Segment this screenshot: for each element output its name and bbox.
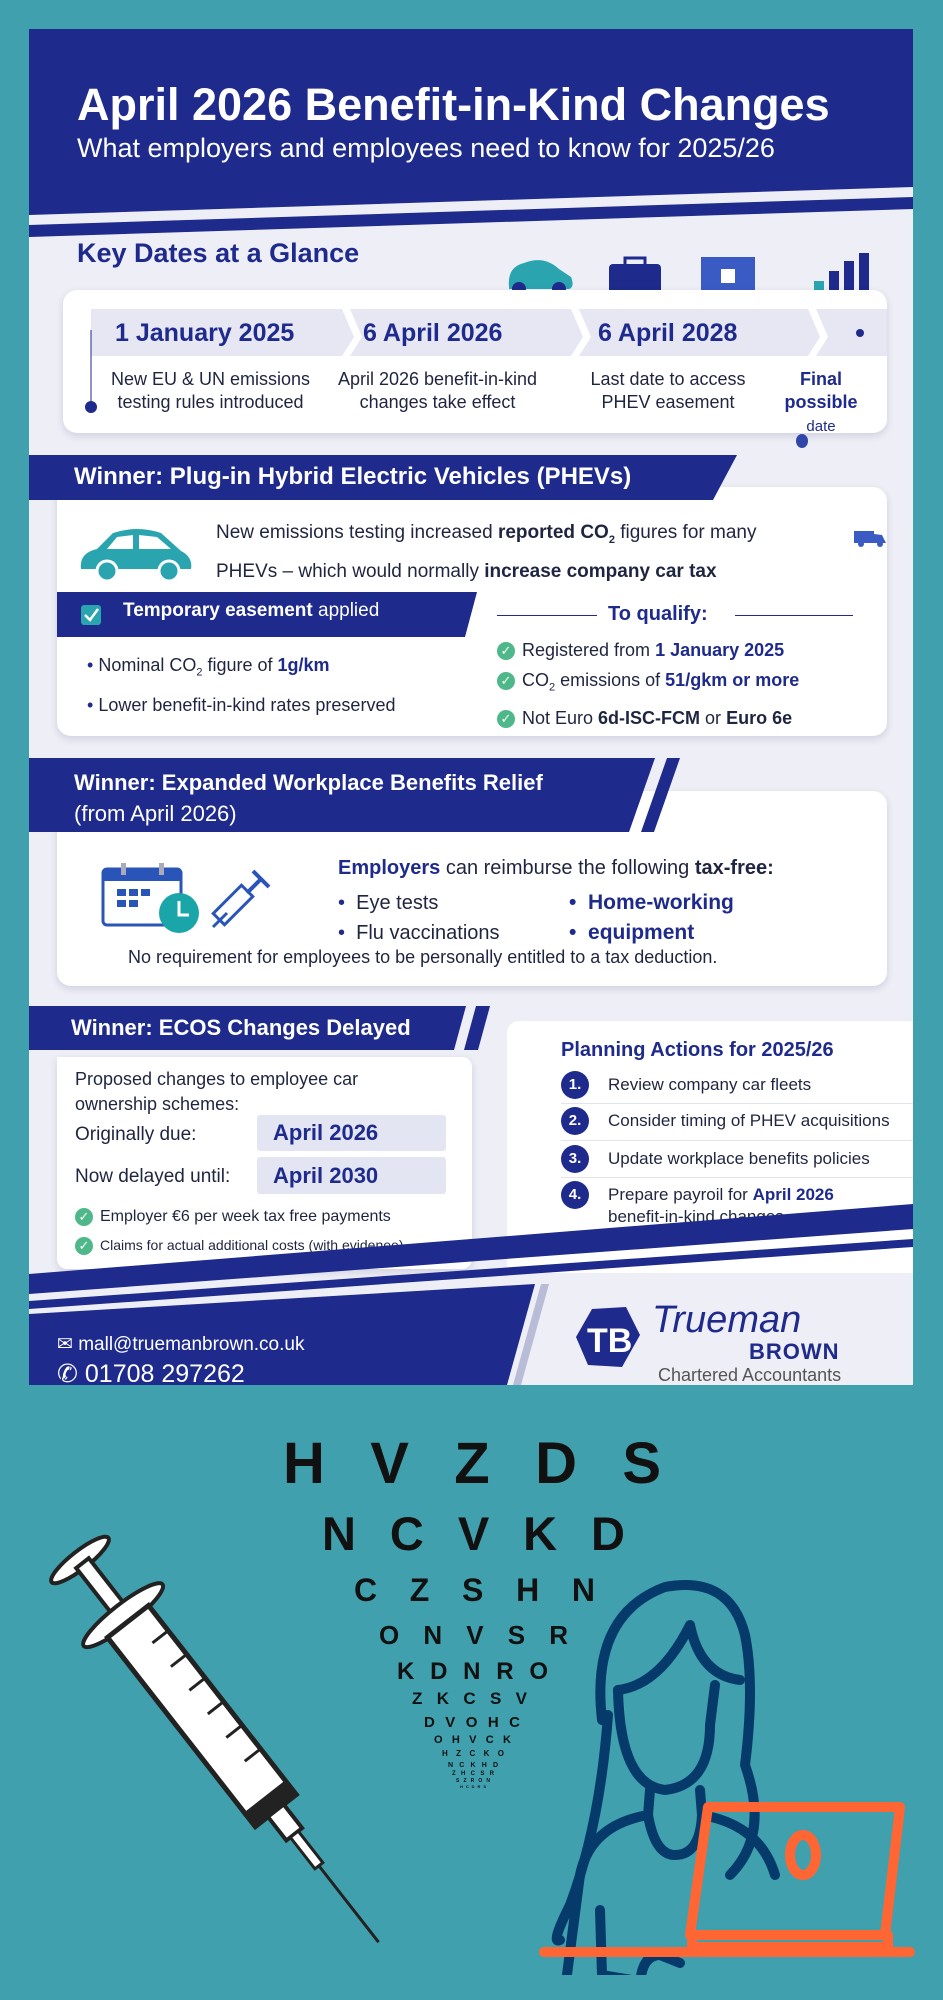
timeline panel: Last date to access PHEV easement <box>590 369 746 412</box>
delayed until: Now delayed until: <box>75 1166 230 1187</box>
temporary easement bar <box>57 592 477 637</box>
banner: PHEVs: Winner: Plug-in Hybrid Electric Vehicles (PHEVs) <box>74 463 631 490</box>
to qualify: Not Euro 6d-ISC-FCM or Euro 6e <box>522 708 792 728</box>
icon: car <box>80 529 192 580</box>
eye chart: NCVKD <box>322 1507 625 1560</box>
text: employers reimburse: Employers can reimburse the following tax-free: <box>338 857 774 879</box>
illustration: woman with laptop <box>539 1580 915 1975</box>
icon: house book <box>701 257 755 295</box>
footer contact: ✉ mall@truemanbrown.co.uk <box>57 1334 304 1355</box>
panel: planning actions: Planning Actions for 2025/26 <box>561 1039 834 1061</box>
panel: ECOS: ownership schemes: <box>75 1094 239 1114</box>
to qualify: ✓ <box>501 673 511 688</box>
banner: workplace benefits: Winner: Expanded Workplace Benefits Relief <box>74 770 543 795</box>
timeline panel: 6 April 2026 <box>363 319 502 347</box>
panel: planning actions: Review company car fleets <box>608 1075 811 1094</box>
panel: PHEV <box>57 487 887 736</box>
icon: van <box>854 531 886 547</box>
icon: syringe <box>211 870 270 928</box>
illustration: syringe <box>49 1534 380 1944</box>
panel: planning actions: Consider timing of PHEV acquisitions <box>608 1111 890 1130</box>
panel: ECOS: April 2030 <box>273 1163 378 1188</box>
banner: workplace benefits: (from April 2026) <box>74 801 237 826</box>
panel: workplace <box>57 791 887 986</box>
text: emissions <box>216 522 756 582</box>
main infographic card <box>29 29 913 1385</box>
timeline panel: 1 January 2025 <box>115 319 294 347</box>
timeline panel: Final possible <box>784 369 858 412</box>
timeline panel: April 2026 benefit-in-kind changes take effect <box>338 369 537 412</box>
icon: car <box>509 260 573 296</box>
reimburse list <box>338 892 500 944</box>
panel: workplace: • equipment <box>569 921 694 944</box>
panel: planning actions: 1. <box>569 1076 581 1093</box>
logo: Trueman <box>652 1299 801 1341</box>
eye chart: HCDRS <box>460 1784 486 1789</box>
title: April 2026 Benefit-in-Kind Changes <box>77 79 830 130</box>
text: emissions: PHEVs – which would normally increase company car tax <box>216 561 717 582</box>
to qualify: ✓ <box>501 643 511 658</box>
eye chart: SZRON <box>456 1778 490 1784</box>
panel: planning actions: 2. <box>569 1112 581 1129</box>
panel: workplace: • Home-working <box>569 891 734 914</box>
to qualify: CO2 emissions of 51/gkm or more <box>522 670 799 694</box>
eye chart: HVZDS <box>283 1431 661 1496</box>
bullets: easement: • Nominal CO2 figure of 1g/km <box>87 655 330 679</box>
panel: PHEV: Temporary easement applied <box>123 600 379 621</box>
logo: Chartered Accountants <box>658 1365 841 1385</box>
logo <box>576 1299 841 1385</box>
panel: planning actions <box>507 1021 913 1273</box>
timeline panel: date <box>806 418 836 435</box>
originally due: Originally due: <box>75 1124 196 1145</box>
panel: ECOS <box>57 1057 472 1269</box>
ECOS checks: Claims for actual additional costs (with evidenee) <box>100 1237 403 1253</box>
reimburse list: • Eye tests <box>338 892 438 914</box>
panel: planning actions: Prepare payroil for April 2026 <box>608 1185 834 1204</box>
eye chart <box>283 1431 661 1789</box>
footer stripes <box>29 1204 913 1385</box>
ECOS checks: ✓ <box>79 1238 89 1253</box>
small dot <box>796 434 808 448</box>
panel: planning actions: 4. <box>569 1186 581 1203</box>
icon: calendar <box>102 863 199 933</box>
to qualify: ✓ <box>501 711 511 726</box>
ECOS checks <box>75 1208 403 1255</box>
panel: planning actions: 3. <box>569 1150 581 1167</box>
bullets: easement <box>87 655 395 715</box>
to qualify <box>497 603 853 728</box>
banner: ECOS: Winner: ECOS Changes Delayed <box>71 1015 411 1040</box>
to qualify: To qualify: <box>608 603 708 625</box>
date chevrons <box>85 309 887 413</box>
banner: workplace benefits <box>74 770 543 826</box>
reimburse list: • Flu vaccinations <box>338 922 500 944</box>
timeline panel: 6 April 2028 <box>598 319 737 347</box>
banner shapes <box>29 455 737 1050</box>
icon: bar chart <box>814 253 869 295</box>
subtitle: What employers and employees need to know for 2025/26 <box>77 133 775 163</box>
eye chart: HZCKO <box>442 1749 504 1758</box>
eye chart: OHVCK <box>434 1734 511 1746</box>
eye chart: ONVSR <box>379 1620 568 1650</box>
text: emissions: New emissions testing increased reported CO2 figures for many <box>216 522 756 546</box>
eye chart: CZSHN <box>354 1572 595 1608</box>
text: no requirement: No requirement for employees to be personally entitled to a tax deduction. <box>128 947 717 967</box>
ECOS checks: ✓ <box>79 1209 89 1224</box>
icon: briefcase <box>609 258 661 296</box>
eye chart: NCKHD <box>448 1762 498 1769</box>
panel: planning actions: Update workplace benefits policies <box>608 1149 870 1168</box>
eye chart: KDNRO <box>397 1658 548 1685</box>
heading: key dates: Key Dates at a Glance <box>77 238 359 268</box>
eye chart: ZKCSV <box>412 1689 528 1708</box>
icons row <box>508 253 869 290</box>
eye chart: DVOHC <box>424 1714 520 1731</box>
panel: planning actions: benefit-in-kind changes <box>608 1207 784 1226</box>
panel: ECOS: Proposed changes to employee car <box>75 1069 358 1089</box>
timeline panel <box>63 290 887 433</box>
eye chart: ZHCSR <box>452 1771 495 1777</box>
date descriptions: New EU & UN emissions testing rules introduced <box>111 369 310 412</box>
header background <box>29 29 913 237</box>
to qualify: Registered from 1 January 2025 <box>522 640 784 660</box>
panel: ECOS: April 2026 <box>273 1120 378 1145</box>
bullets: easement: • Lower benefit-in-kind rates preserved <box>87 695 395 715</box>
ECOS checks: Employer €6 per week tax free payments <box>100 1208 391 1225</box>
logo: TB <box>587 1322 632 1360</box>
logo: BROWN <box>749 1339 840 1364</box>
